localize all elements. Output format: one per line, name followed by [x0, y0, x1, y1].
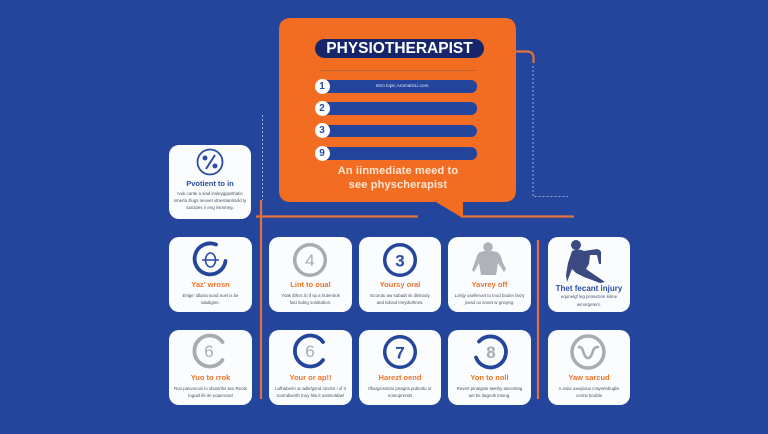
- list number 3: [314, 123, 330, 138]
- card heading: Lint to oual: [290, 280, 331, 288]
- card text: smerla Jlugs neuvet idnestianlstold ly: [174, 198, 246, 203]
- card: row 2 column 3: [359, 330, 441, 405]
- list bar 3: [327, 124, 477, 137]
- list bar 2: [327, 102, 477, 114]
- card heading: Thet fecant injury: [556, 284, 622, 292]
- list number 2: 2: [319, 102, 325, 114]
- icon: ring with symbol: [192, 241, 228, 276]
- card text: Ecorutu aw sabadt iin dlnitouly: [370, 293, 430, 298]
- card heading: Harezt oend: [379, 372, 421, 382]
- bubble caption: [338, 165, 458, 191]
- icon: number 6 blue open ring: 6: [305, 342, 315, 361]
- icon: curved arrow ring: [570, 334, 606, 370]
- card heading: Yaz' wrosn: [191, 280, 230, 288]
- icon: injured runner: [566, 240, 605, 283]
- title pill: PHYSIOTHERAPIST: [326, 40, 473, 57]
- list number 1: [314, 78, 330, 94]
- card text: [457, 386, 522, 398]
- list number 9: 9: [319, 148, 325, 158]
- card text: Ysak dthot .ib if sp a huterstok: [281, 293, 340, 298]
- card: row 2 column 4: [448, 330, 531, 405]
- card text: loguid ife ite yopencasl: [188, 393, 233, 398]
- card text: conrw bouble: [576, 393, 602, 398]
- card text: Ruo pavvoconi lo sbusirihs two Reots: [174, 386, 247, 391]
- card text: [368, 386, 432, 398]
- card text: Ifhargicsnisto pnagns pubtultu or: [368, 386, 432, 391]
- list number 2: [314, 100, 330, 116]
- card heading: Pvotient to in: [186, 179, 234, 188]
- card text: toomdiverth tnuy hlw it sotimoldael: [277, 393, 344, 398]
- card text: [558, 386, 620, 398]
- card text: eqonelgf leg protection letine: [561, 294, 617, 298]
- card text: ael be itagroik intong.: [469, 393, 510, 398]
- card text: Lafhaberin ar adlefgsnd nicolor i of it: [275, 386, 346, 391]
- icon: number 7 ring: 7: [395, 344, 405, 362]
- card: recent injury: [548, 237, 630, 312]
- list number 3: 3: [319, 125, 325, 136]
- card: patient intro: [169, 145, 251, 219]
- card heading: Yaw sarcud: [568, 372, 610, 382]
- card text: and bdosd Ineyduthnes.: [377, 300, 423, 305]
- card heading: Yoursy oral: [380, 280, 420, 288]
- icon: torso figure: [472, 242, 506, 275]
- card: row 1 column 1: [169, 237, 252, 312]
- card text: Enlge' idlancround nuel is be: [182, 293, 238, 298]
- icon: number 8 open ring: [474, 334, 508, 370]
- card: row 1 column 2: [269, 237, 352, 312]
- card: row 2 column 5: [548, 330, 630, 405]
- card text: wmorgeters.: [577, 302, 601, 306]
- card: row 2 column 2: [269, 330, 352, 405]
- card: row 1 column 3: [359, 237, 441, 312]
- icon: number 4 ring: 4: [305, 251, 315, 270]
- card text: [275, 386, 346, 398]
- card text: fast lodng sontitation.: [290, 300, 331, 305]
- icon: number 4 ring: [293, 243, 327, 277]
- list bar 1: Intro topic AromaticLi.com: [376, 83, 428, 88]
- icon: number 8 open ring: 8: [486, 343, 496, 362]
- list bar 4: [327, 147, 477, 160]
- card heading: Yavrey off: [472, 280, 507, 288]
- card text: Ivuk cante a siad insleygppsthatic: [177, 190, 243, 196]
- card: row 2 column 1: [169, 330, 252, 405]
- card text: [561, 294, 617, 307]
- speech bubble panel: [279, 18, 516, 217]
- icon: number 6 open ring: 6: [204, 342, 214, 361]
- card text: [174, 190, 246, 210]
- icon: number 3 ring: 3: [395, 252, 405, 270]
- divider under title: [320, 70, 475, 71]
- list number 9: [314, 146, 330, 160]
- card text: [281, 293, 340, 305]
- card heading: Your or ap!!: [290, 372, 331, 382]
- card text: nomoprends: [388, 393, 412, 398]
- icon: percent badge: [196, 148, 224, 176]
- card text: Lolsjy uselleroet tu Inod bouler bvzy: [455, 293, 524, 298]
- card text: [370, 293, 430, 305]
- card text: jvosd oo snoet w gnoyng.: [465, 300, 514, 305]
- card heading: Yon to noll: [470, 372, 509, 382]
- card heading: Yuo to rrok: [191, 372, 230, 382]
- icon: number 7 ring: [382, 335, 418, 369]
- card text: Revert pinaigste twethy ascenting: [457, 386, 522, 391]
- card text: A.nsiw oxwpious crayerlobuglis: [559, 386, 619, 391]
- card: row 1 column 4: [448, 237, 531, 312]
- list bar 1: [327, 80, 477, 92]
- card text: idadigine.: [201, 300, 220, 305]
- card text: sanzpes ri eng inimmeg.: [186, 205, 234, 210]
- card text: [182, 293, 238, 305]
- card text: [174, 386, 247, 398]
- bubble caption: An iinmediate meed to: [338, 165, 458, 177]
- icon: number 3 ring: [382, 243, 418, 277]
- card text: [455, 293, 524, 305]
- icon: number 6 blue open ring: [293, 334, 325, 368]
- list number 1: 1: [319, 80, 325, 92]
- icon: number 6 open ring: [192, 334, 224, 368]
- bubble caption: see physcherapist: [349, 179, 447, 191]
